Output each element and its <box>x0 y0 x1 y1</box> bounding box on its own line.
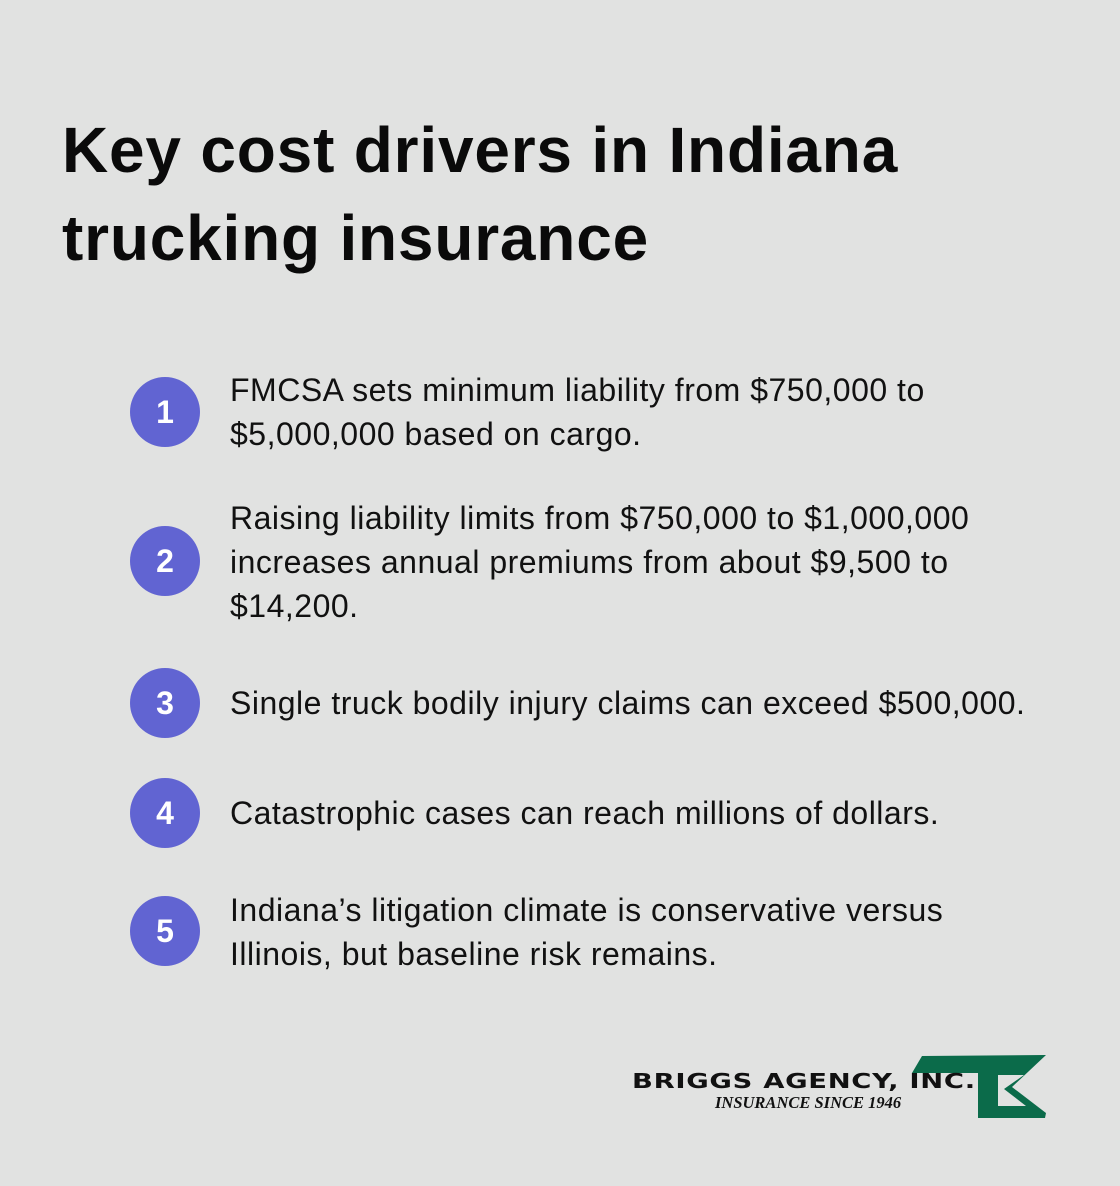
title: trucking insurance <box>62 202 649 274</box>
text 5: Illinois, but baseline risk remains. <box>230 936 718 972</box>
text 5 <box>230 892 943 972</box>
title: Key cost drivers in Indiana <box>62 114 898 186</box>
text 2: Raising liability limits from $750,000 to $1,000,000 <box>230 500 969 536</box>
badge 4 <box>130 778 200 848</box>
text 5: Indiana’s litigation climate is conservative versus <box>230 892 943 928</box>
text 1: $5,000,000 based on cargo. <box>230 416 642 452</box>
badge 1: 1 <box>156 394 174 430</box>
logo text: BRIGGS AGENCY, INC. <box>632 1069 976 1093</box>
item 3 <box>130 668 1025 738</box>
item 5 <box>130 892 943 972</box>
text 2: increases annual premiums from about $9,500 to <box>230 544 948 580</box>
badge 3: 3 <box>156 685 174 721</box>
badge 2 <box>130 526 200 596</box>
badge 3 <box>130 668 200 738</box>
text 2 <box>230 500 969 624</box>
badge 4: 4 <box>156 795 174 831</box>
logo mark <box>912 1055 1046 1118</box>
badge 1 <box>130 377 200 447</box>
title <box>62 114 898 274</box>
text 2: $14,200. <box>230 588 359 624</box>
text 4: Catastrophic cases can reach millions of dollars. <box>230 795 939 831</box>
item 4 <box>130 778 939 848</box>
badge 5 <box>130 896 200 966</box>
logo tagline: INSURANCE SINCE 1946 <box>715 1093 901 1112</box>
text 1 <box>230 372 925 452</box>
text 3: Single truck bodily injury claims can exceed $500,000. <box>230 685 1025 721</box>
text 1: FMCSA sets minimum liability from $750,000 to <box>230 372 925 408</box>
badge 5: 5 <box>156 913 174 949</box>
badge 2: 2 <box>156 543 174 579</box>
item 1 <box>130 372 925 452</box>
logo <box>632 1055 1046 1118</box>
item 2 <box>130 500 969 624</box>
